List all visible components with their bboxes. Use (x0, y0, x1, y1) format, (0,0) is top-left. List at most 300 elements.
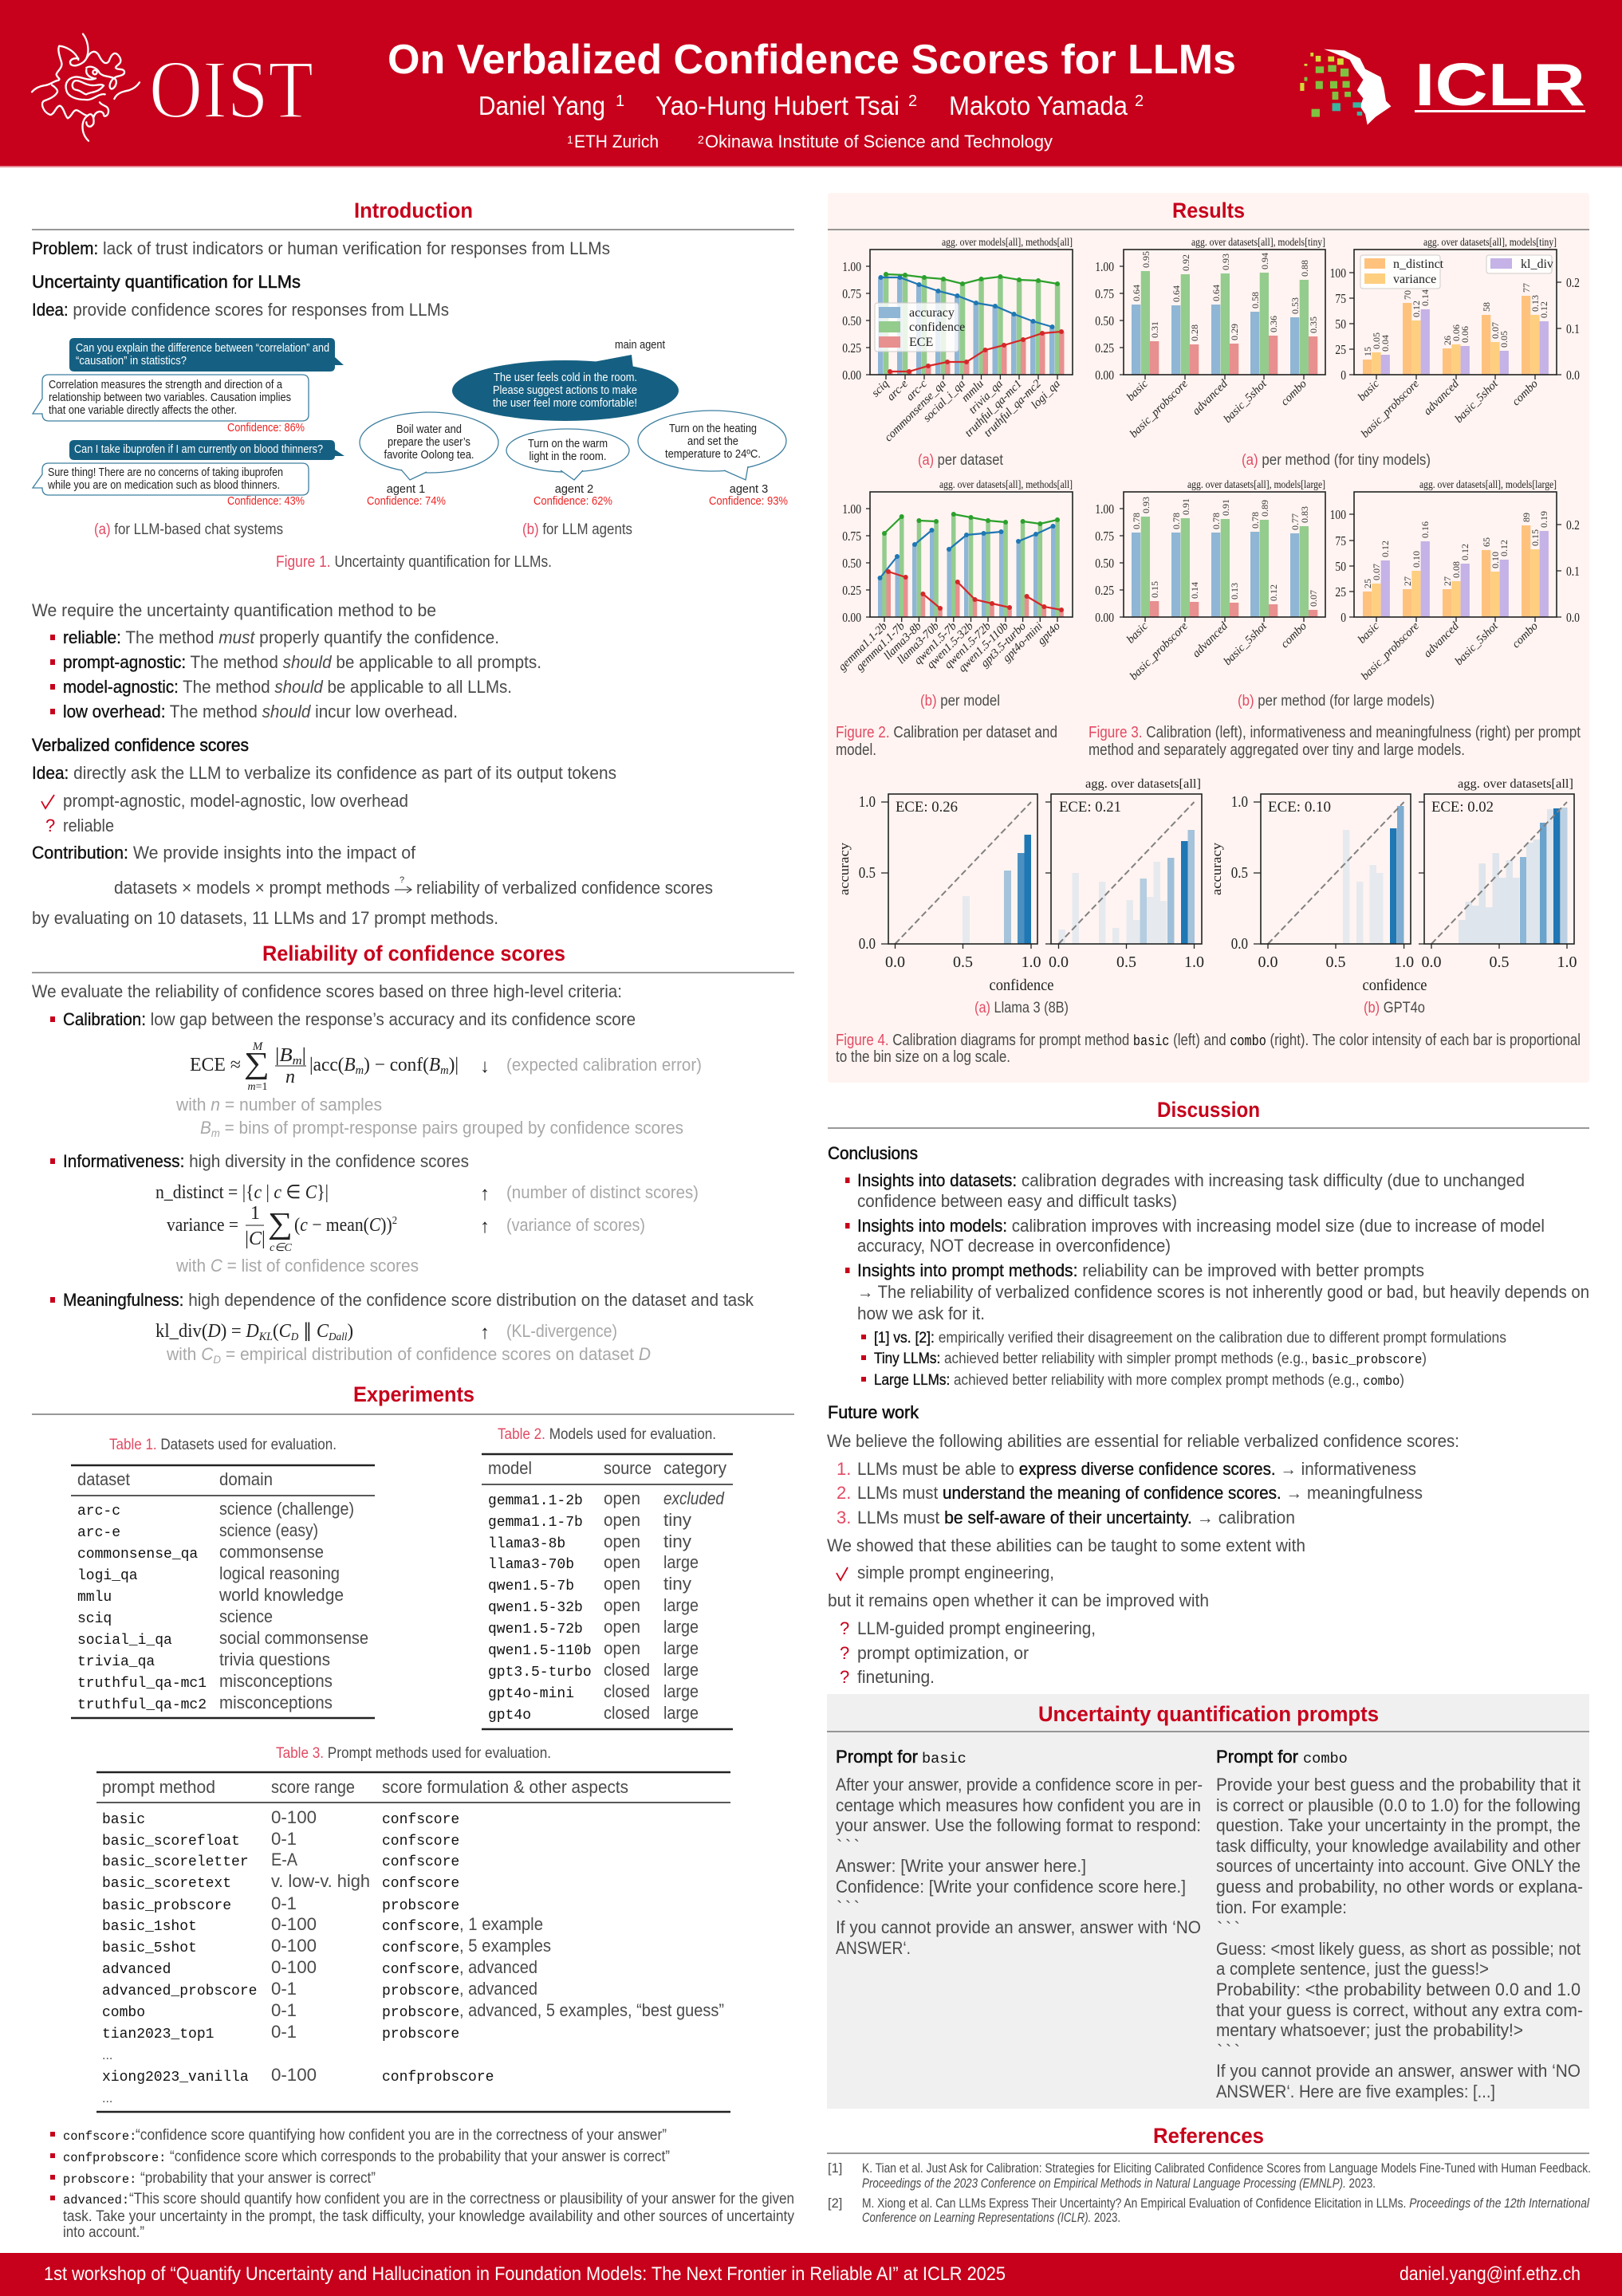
chart: calibration per method large: 0.25 (1095, 584, 1114, 598)
left plot: 1.0 (859, 793, 876, 811)
criterion: calibration: B (429, 1055, 440, 1075)
score formulation notes: advanced: (63, 2193, 129, 2208)
chart: calibration per method large (1095, 479, 1325, 682)
figure 1a: chat bubbles: while you are on medication such as blood thinners. (47, 479, 280, 492)
icon: ICLR head logo (1300, 49, 1391, 125)
table 3: prompt methods: advanced (102, 1962, 171, 1978)
table 1: datasets: Table 1. Datasets used for evaluation. (109, 1437, 337, 1453)
table 2: models: gemma1.1-2b (488, 1493, 583, 1509)
chart: calibration per method large: 0.13 (1229, 583, 1240, 600)
table 3: prompt methods: confprobscore (382, 2070, 494, 2086)
chart: informativeness tiny (1330, 237, 1580, 440)
table 3: prompt methods: 0-100 (271, 1914, 317, 1934)
criterion: meaningfulness: D (290, 1331, 298, 1343)
criterion: informativeness: (number of distinct scores) (506, 1182, 699, 1202)
table 1: datasets: sciq (77, 1611, 112, 1627)
future work text: ? (840, 1618, 849, 1638)
chart: informativeness tiny: variance (1393, 273, 1436, 286)
chart: calibration per dataset: mmlu (959, 378, 986, 405)
right plot: 0.5 (1116, 953, 1136, 971)
table 2: models: closed (604, 1681, 650, 1701)
chart: calibration per method large: 1.00 (1095, 502, 1114, 517)
criterion: calibration: with n = number of samples (175, 1095, 382, 1115)
chart: informativeness large: 75 (1335, 534, 1346, 548)
chart: calibration per method large: basic_5shot (1222, 619, 1270, 668)
table 2: models: open (604, 1574, 640, 1594)
table 3: prompt methods: score range (271, 1777, 355, 1797)
authors: Yao-Hung Hubert Tsai (655, 91, 900, 120)
chart: informativeness tiny: basic (1356, 377, 1382, 403)
figure 3 caption (1089, 724, 1581, 759)
reference 2: Conference on Learning Representations (ICLR). 2023. (862, 2211, 1120, 2225)
chart: informativeness large: 0.0 (1566, 611, 1580, 625)
figure 2 caption (836, 724, 1057, 759)
future work text: We showed that these abilities can be taught to some extent with (827, 1535, 1305, 1555)
left plot (837, 793, 1041, 971)
chart: informativeness tiny: 0.13 (1529, 295, 1541, 312)
table 3: prompt methods: confscore (382, 1834, 459, 1850)
criterion: calibration: m (211, 1126, 220, 1139)
right plot: 0.0 (1421, 953, 1442, 971)
chart: calibration per method tiny: 0.00 (1095, 368, 1114, 383)
table 3: prompt methods: 0-100 (271, 1957, 317, 1977)
future work text: 3. (837, 1508, 851, 1527)
chart: informativeness large: 0.2 (1566, 518, 1580, 533)
table 2: models: tiny (663, 1531, 691, 1551)
criterion: calibration (50, 1009, 702, 1139)
table 3: prompt methods: confscore (382, 1919, 459, 1935)
chart: informativeness large: 0.08 (1451, 561, 1462, 578)
criterion: meaningfulness (50, 1290, 754, 1366)
table 1: datasets: science (easy) (219, 1520, 318, 1540)
table 3: prompt methods: confscore (382, 1876, 459, 1892)
chart: calibration per method tiny: 0.75 (1095, 287, 1114, 301)
table 2: models: closed (604, 1703, 650, 1723)
figure 1b: agents: agent 3 (730, 483, 768, 496)
chart: informativeness large: 89 (1521, 513, 1532, 522)
subheading: conclusions: Conclusions (828, 1143, 918, 1163)
future work text (827, 1431, 1459, 1687)
figure 1a: chat bubbles (33, 338, 344, 508)
table 3: prompt methods: v. low-v. high (271, 1871, 370, 1891)
chart: calibration per dataset: agg. over models[all], methods[all] (942, 237, 1073, 249)
table 2: models: gemma1.1-7b (488, 1515, 583, 1531)
right plot (1045, 794, 1204, 971)
chart: informativeness large: 27 (1402, 576, 1413, 586)
heading: reliability: Reliability of confidence scores (262, 942, 565, 965)
table 1: datasets: dataset (77, 1469, 130, 1489)
figure 1b: agents: Confidence: 93% (709, 494, 788, 508)
criterion: meaningfulness: ∥ (298, 1321, 317, 1342)
OIST wordmark: OIST (149, 44, 313, 136)
table 2: models: qwen1.5-7b (488, 1578, 574, 1594)
left plot: 1.0 (1021, 953, 1041, 971)
table 2: models: llama3-70b (488, 1557, 574, 1573)
prompt for combo: ``` (1217, 1918, 1240, 1938)
idea and contribution text: Idea: directly ask the LLM to verbalize its confidence as part of its output tokens (32, 763, 616, 783)
figure 1b: agents: temperature to 24ºC. (665, 448, 761, 461)
criterion: meaningfulness: C (317, 1321, 329, 1342)
table 1: datasets: commonsense_qa (77, 1547, 198, 1563)
table 2: models: gpt4o-mini (488, 1686, 574, 1702)
chart: calibration per method tiny: 0.93 (1220, 254, 1231, 270)
table 1: datasets: logical reasoning (219, 1563, 340, 1583)
table 2: models: qwen1.5-110b (488, 1643, 592, 1659)
future work text: simple prompt engineering, (857, 1563, 1054, 1582)
chart: informativeness tiny: 77 (1521, 283, 1532, 293)
chart: calibration per method tiny: 0.53 (1289, 297, 1301, 314)
subcaption b: (b) for LLM agents (522, 521, 632, 538)
authors: 1 (616, 92, 624, 110)
prompt for basic: Confidence: [Write your confidence score here.] (836, 1877, 1186, 1897)
chart: calibration per method tiny: advanced (1190, 377, 1230, 418)
prompt for basic: your answer. Use the following format to respond: (836, 1815, 1201, 1835)
conclusions list (845, 1170, 1589, 1390)
chart: calibration per dataset: accuracy (909, 306, 955, 320)
future work text: finetuning. (857, 1667, 935, 1687)
table 2: models: large (663, 1703, 699, 1723)
chart: informativeness tiny: 100 (1330, 266, 1346, 281)
criterion: meaningfulness: D (213, 1353, 221, 1366)
table 2: models: model (488, 1458, 532, 1478)
chart: calibration per method large: 0.91 (1220, 499, 1231, 516)
chart: informativeness large: 0.16 (1419, 521, 1431, 538)
chart: calibration per method large: 0.15 (1149, 581, 1160, 598)
prompt for combo: sources of uncertainty into account. Give ONLY the (1216, 1856, 1581, 1876)
future work text: 2. (837, 1483, 851, 1503)
chart: calibration per dataset: trivia_qa (967, 378, 1006, 416)
chart: calibration per method large: 0.93 (1140, 497, 1152, 513)
intro sentence: We evaluate the reliability of confidence scores based on three high-level criteria: (32, 981, 622, 1001)
ICLR wordmark: ICLR (1415, 51, 1585, 118)
chart: calibration per model: 0.50 (842, 556, 861, 571)
criterion: calibration: = bins of prompt-response pairs grouped by confidence scores (220, 1118, 683, 1138)
figure 1a: chat bubbles: Can I take ibuprofen if I am currently on blood thinners? (74, 443, 323, 456)
chart: calibration per method tiny: basic_probscore (1128, 377, 1191, 440)
left plot: 0.5 (859, 864, 876, 882)
chart: calibration per method tiny: combo (1278, 378, 1309, 408)
chart: calibration per dataset: arc-c (904, 377, 930, 403)
chart: informativeness tiny: 0.05 (1371, 332, 1382, 349)
table 1: datasets: misconceptions (219, 1671, 333, 1691)
footer: daniel.yang@inf.ethz.ch (1400, 2263, 1581, 2285)
figure 1b: agents: Confidence: 74% (367, 494, 446, 508)
chart: informativeness tiny: basic_probscore (1359, 377, 1422, 440)
chart: informativeness tiny: 0.07 (1490, 322, 1501, 339)
chart: calibration per method large: 0.78 (1250, 512, 1261, 529)
table 1: datasets: truthful_qa-mc2 (77, 1697, 207, 1713)
table 3: prompt methods: probscore (382, 1983, 459, 1999)
left plot: ECE: 0.26 (896, 799, 958, 816)
chart: calibration per dataset: 0.25 (842, 341, 861, 356)
figure 1b: agents: favorite Oolong tea. (384, 449, 474, 462)
conclusions list: how we ask for it. (857, 1303, 985, 1323)
table 3: prompt methods: confscore (382, 1962, 459, 1978)
left plot: 0.0 (1258, 953, 1278, 971)
requirements text: reliable: The method must properly quantify the confidence. (63, 627, 499, 647)
figure 1b: agents: The user feels cold in the room. (494, 371, 637, 384)
table 3: prompt methods: Table 3. Prompt methods used for evaluation. (276, 1745, 551, 1762)
title: On Verbalized Confidence Scores for LLMs (388, 37, 1236, 83)
chart: informativeness large: 0.12 (1459, 544, 1470, 560)
prompt for combo (1216, 1747, 1583, 2101)
table 3: prompt methods: tian2023_top1 (102, 2027, 214, 2042)
affiliations: ETH Zurich (574, 132, 659, 151)
criterion: meaningfulness: KL (258, 1331, 273, 1343)
criterion: meaningfulness: Meaningfulness: high dependence of the confidence score distribution on the dataset and task (63, 1290, 754, 1310)
table 1: datasets: logi_qa (77, 1568, 138, 1584)
table 1: datasets: world knowledge (218, 1585, 344, 1605)
chart: calibration per dataset (842, 237, 1073, 444)
future work text: ? (840, 1643, 849, 1663)
subcaption per dataset: (a) per dataset (918, 452, 1004, 469)
idea and contribution text: Contribution: We provide insights into the impact of (32, 843, 416, 863)
idea and contribution text: by evaluating on 10 datasets, 11 LLMs and 17 prompt methods. (32, 908, 498, 928)
table 2: models: large (663, 1660, 699, 1680)
figure 1b: agents: Turn on the heating (669, 423, 757, 435)
chart: informativeness tiny: advanced (1421, 377, 1462, 418)
criterion: calibration: B (200, 1118, 211, 1138)
chart: calibration per method large: 0.50 (1095, 556, 1114, 571)
table 1: datasets: arc-e (77, 1525, 120, 1541)
chart: informativeness tiny: 0.04 (1380, 335, 1391, 352)
chart: calibration per method large: basic_probscore (1128, 619, 1191, 682)
criterion: meaningfulness: = empirical distribution of confidence scores on dataset (221, 1344, 639, 1364)
table 1: datasets: social_i_qa (77, 1633, 172, 1649)
criterion: calibration: m (293, 1055, 302, 1067)
criterion: meaningfulness: D (639, 1344, 651, 1364)
score formulation notes: “confidence score which corresponds to the probability that your answer is correct” (170, 2149, 670, 2165)
prompt for basic: centage which measures how confident you are in (836, 1795, 1201, 1815)
score formulation notes: “This score should quantify how confident you are in the correctness or plausibility of your answer for the given (129, 2191, 794, 2208)
chart: informativeness large: combo (1510, 620, 1541, 651)
chart: informativeness large: agg. over datasets[all], models[large] (1419, 479, 1557, 491)
figure 1b: agents: Boil water and (396, 423, 462, 436)
criterion: meaningfulness: ↑ (480, 1323, 490, 1343)
chart: calibration diagrams Llama 3: agg. over datasets[all] (1085, 777, 1201, 791)
chart: calibration per method tiny: 0.50 (1095, 314, 1114, 328)
chart: informativeness large: 0.12 (1380, 541, 1391, 557)
subheading: uncertainty quantification: Uncertainty quantification for LLMs (32, 272, 301, 292)
chart: informativeness large: advanced (1421, 619, 1462, 660)
figure 1b: agents: agent 2 (555, 483, 593, 496)
prompt for basic: ``` (837, 1836, 860, 1856)
table 2: models: large (663, 1552, 699, 1572)
prompt for basic: basic (922, 1751, 967, 1767)
figure 1b: agents (360, 339, 788, 508)
requirements text: We require the uncertainty quantification method to be (32, 600, 436, 620)
chart: calibration per method tiny: 0.36 (1268, 316, 1279, 332)
chart: informativeness tiny: 0.1 (1566, 322, 1580, 336)
table 2: models: gpt4o (488, 1708, 531, 1724)
criterion: calibration: m=1 (247, 1081, 268, 1093)
chart: informativeness tiny: 70 (1402, 290, 1413, 300)
table 3: prompt methods (96, 1745, 730, 2112)
conclusions list: Tiny LLMs: achieved better reliability with simpler prompt methods (e.g., basic_probscore) (874, 1350, 1427, 1368)
prompt for combo: Probability: <the probability between 0.0 and 1.0 (1216, 1980, 1581, 1999)
table 3: prompt methods: confscore (382, 1940, 459, 1956)
criterion: calibration: m (440, 1064, 449, 1077)
chart: informativeness large: basic_probscore (1359, 619, 1422, 682)
figure 1b: agents: Please suggest actions to make (493, 383, 637, 397)
chart: informativeness tiny: kl_div (1521, 258, 1553, 271)
chart: informativeness tiny: combo (1510, 378, 1541, 408)
chart: calibration per method large: 0.12 (1268, 584, 1279, 601)
figure 1b: agents: prepare the user’s (388, 436, 470, 449)
chart: calibration per method tiny: 0.92 (1180, 254, 1191, 271)
left plot (1209, 793, 1414, 971)
chart: informativeness tiny: 15 (1362, 347, 1373, 356)
conclusions list: Insights into prompt methods: reliability can be improved with better prompts (857, 1260, 1424, 1280)
subcaption per model: (b) per model (920, 693, 1000, 710)
subcaption per method tiny: (a) per method (for tiny models) (1242, 452, 1431, 469)
prompt for basic: After your answer, provide a confidence score in per- (836, 1775, 1203, 1795)
chart: calibration per model: 1.00 (842, 502, 861, 517)
criterion: informativeness: ↑ (480, 1184, 490, 1205)
criterion: calibration: (expected calibration error) (506, 1055, 702, 1075)
future work text: prompt optimization, or (857, 1643, 1029, 1663)
table 3: prompt methods: combo (102, 2005, 145, 2021)
table 3: prompt methods: score formulation & other aspects (382, 1777, 628, 1797)
chart: calibration per method tiny: 0.88 (1299, 260, 1310, 277)
prompt for basic: Prompt for (836, 1747, 918, 1767)
chart: calibration per method large: combo (1278, 620, 1309, 651)
table 3: prompt methods: basic_scorefloat (102, 1834, 240, 1850)
section: References (827, 2124, 1591, 2225)
table 2: models: source (604, 1458, 652, 1478)
criterion: informativeness: 1 (250, 1203, 260, 1224)
table 3: prompt methods: basic_scoreletter (102, 1854, 249, 1870)
requirements text (32, 600, 541, 721)
score formulation notes: “confidence score quantifying how confident you are in the correctness of your answer” (136, 2127, 667, 2144)
chart: informativeness tiny: basic_5shot (1453, 377, 1502, 426)
left plot: 0.0 (1231, 935, 1248, 953)
table 3: prompt methods: 0-1 (271, 1893, 297, 1913)
chart: informativeness large: 65 (1481, 537, 1492, 547)
chart: informativeness tiny: 0.05 (1498, 331, 1510, 348)
prompt for combo: If you cannot provide an answer, answer with ‘NO (1216, 2061, 1581, 2081)
authors: 2 (908, 92, 917, 110)
authors: 2 (1135, 92, 1144, 110)
chart: informativeness large: 25 (1362, 579, 1373, 588)
chart: calibration per dataset: sciq (869, 378, 892, 399)
chart: calibration per method large: agg. over datasets[all], models[large] (1187, 479, 1325, 491)
criterion: informativeness: (variance of scores) (506, 1215, 645, 1235)
authors (478, 91, 1144, 120)
criterion: meaningfulness: kl_div(D) = D (156, 1321, 260, 1342)
heading: experiments: Experiments (353, 1382, 474, 1406)
chart: calibration per model: gpt3.5-turbo (978, 620, 1029, 670)
reference 1 (828, 2161, 1591, 2191)
chart: calibration per method tiny (1095, 237, 1325, 440)
chart: calibration per model: 0.00 (842, 611, 861, 625)
table 3: prompt methods: basic (102, 1812, 145, 1828)
left plot: 0.0 (859, 935, 876, 953)
subcaption a: (a) for LLM-based chat systems (94, 521, 283, 538)
prompt for combo: combo (1303, 1751, 1348, 1767)
prompt for combo: a complete sentence, just the guess!> (1216, 1959, 1489, 1979)
table 2: models: excluded (663, 1488, 725, 1508)
idea line: Idea: provide confidence scores for responses from LLMs (32, 300, 449, 320)
figure 1a: chat bubbles: Confidence: 86% (227, 421, 305, 434)
score formulation notes: into account.” (63, 2224, 144, 2241)
criterion: meaningfulness: with C (167, 1344, 214, 1364)
reference 2: M. Xiong et al. Can LLMs Express Their Uncertainty? An Empirical Evaluation of Confidence Elicitation in LLMs. Proceedings of the 12th International (862, 2196, 1590, 2211)
chart: informativeness large: 0.15 (1529, 529, 1541, 546)
criterion: calibration: | (302, 1045, 306, 1066)
idea and contribution text: prompt-agnostic, model-agnostic, low overhead (63, 791, 408, 811)
chart: calibration per method large: advanced (1190, 619, 1230, 660)
future work text: 1. (837, 1459, 851, 1479)
table 3: prompt methods: , advanced (459, 1957, 537, 1977)
icon: OIST dragon logo (32, 34, 140, 141)
panel: Uncertainty quantification prompts (827, 1694, 1589, 2109)
table 2: models: Table 2. Models used for evaluation. (498, 1426, 716, 1443)
chart: calibration per model: qwen1.5-32b (924, 620, 976, 671)
table 2: models: open (604, 1488, 640, 1508)
subheading: verbalized confidence scores: Verbalized confidence scores (32, 735, 249, 755)
figure 1a: chat bubbles: Confidence: 43% (227, 494, 305, 508)
figure 4 caption: to the bin size on a log scale. (836, 1048, 1010, 1066)
criterion: informativeness: |C| (245, 1229, 266, 1249)
table 3: prompt methods: probscore (382, 2027, 459, 2042)
table 1: datasets: science (219, 1606, 273, 1626)
prompt for combo: question. Take your uncertainty in the prompt, the (1216, 1815, 1581, 1835)
table 3: prompt methods: , 5 examples (459, 1936, 551, 1956)
chart: calibration diagrams GPT4o: agg. over datasets[all] (1458, 777, 1573, 791)
criterion: informativeness: ↑ (480, 1217, 490, 1237)
prompt for combo: ``` (1217, 2041, 1240, 2061)
prompt for combo: Provide your best guess and the probability that it (1216, 1775, 1581, 1795)
table 3: prompt methods: confscore (382, 1854, 459, 1870)
criterion: informativeness (50, 1151, 699, 1276)
future work text: but it remains open whether it can be improved with (828, 1590, 1209, 1610)
chart: calibration per model: qwen1.5-110b (956, 620, 1011, 674)
heading: prompts: Uncertainty quantification prompts (1038, 1702, 1379, 1726)
idea and contribution text: ? (400, 875, 404, 885)
prompt for combo: that your guess is correct, without any extra com- (1216, 2000, 1583, 2020)
figure 4 caption: Figure 4. Calibration diagrams for prompt method basic (left) and combo (right). The color intensity of each bar is proportional (836, 1032, 1581, 1050)
score formulation notes: “probability that your answer is correct” (140, 2170, 376, 2187)
chart: calibration per model: qwen1.5-7b (911, 620, 959, 667)
table 3: prompt methods: ... (102, 2049, 112, 2062)
table 3: prompt methods: advanced_probscore (102, 1983, 257, 1999)
chart: calibration per model (836, 479, 1073, 674)
chart: informativeness tiny: 50 (1335, 317, 1346, 332)
criterion: calibration: ∑ (244, 1047, 270, 1080)
right plot: 1.0 (1184, 953, 1204, 971)
chart: calibration per method tiny: 0.31 (1149, 321, 1160, 338)
chart: informativeness tiny: n_distinct (1393, 258, 1444, 271)
criterion: informativeness: c∈C (270, 1242, 293, 1254)
table 2: models: closed (604, 1660, 650, 1680)
table 3: prompt methods: E-A (271, 1850, 297, 1869)
table 2: models: qwen1.5-72b (488, 1622, 583, 1637)
chart: calibration per method large: 0.89 (1259, 500, 1270, 517)
chart: calibration per model: gpt4o (1035, 620, 1063, 647)
chart: calibration per method large: 0.78 (1171, 513, 1182, 529)
conclusions list: Insights into datasets: calibration degrades with increasing task difficulty (due to unchanged (857, 1170, 1525, 1190)
criterion: calibration: ECE ≈ (190, 1055, 241, 1075)
right plot: 0.0 (1049, 953, 1069, 971)
criterion: calibration: |B (275, 1045, 291, 1066)
idea and contribution text (32, 763, 713, 928)
chart: informativeness large: 25 (1335, 585, 1346, 600)
future work text: LLMs must understand the meaning of confidence scores. → meaningfulness (857, 1483, 1423, 1503)
score formulation notes (50, 2127, 794, 2241)
header banner (0, 0, 1622, 167)
criterion: informativeness: with C = list of confidence scores (175, 1256, 419, 1276)
